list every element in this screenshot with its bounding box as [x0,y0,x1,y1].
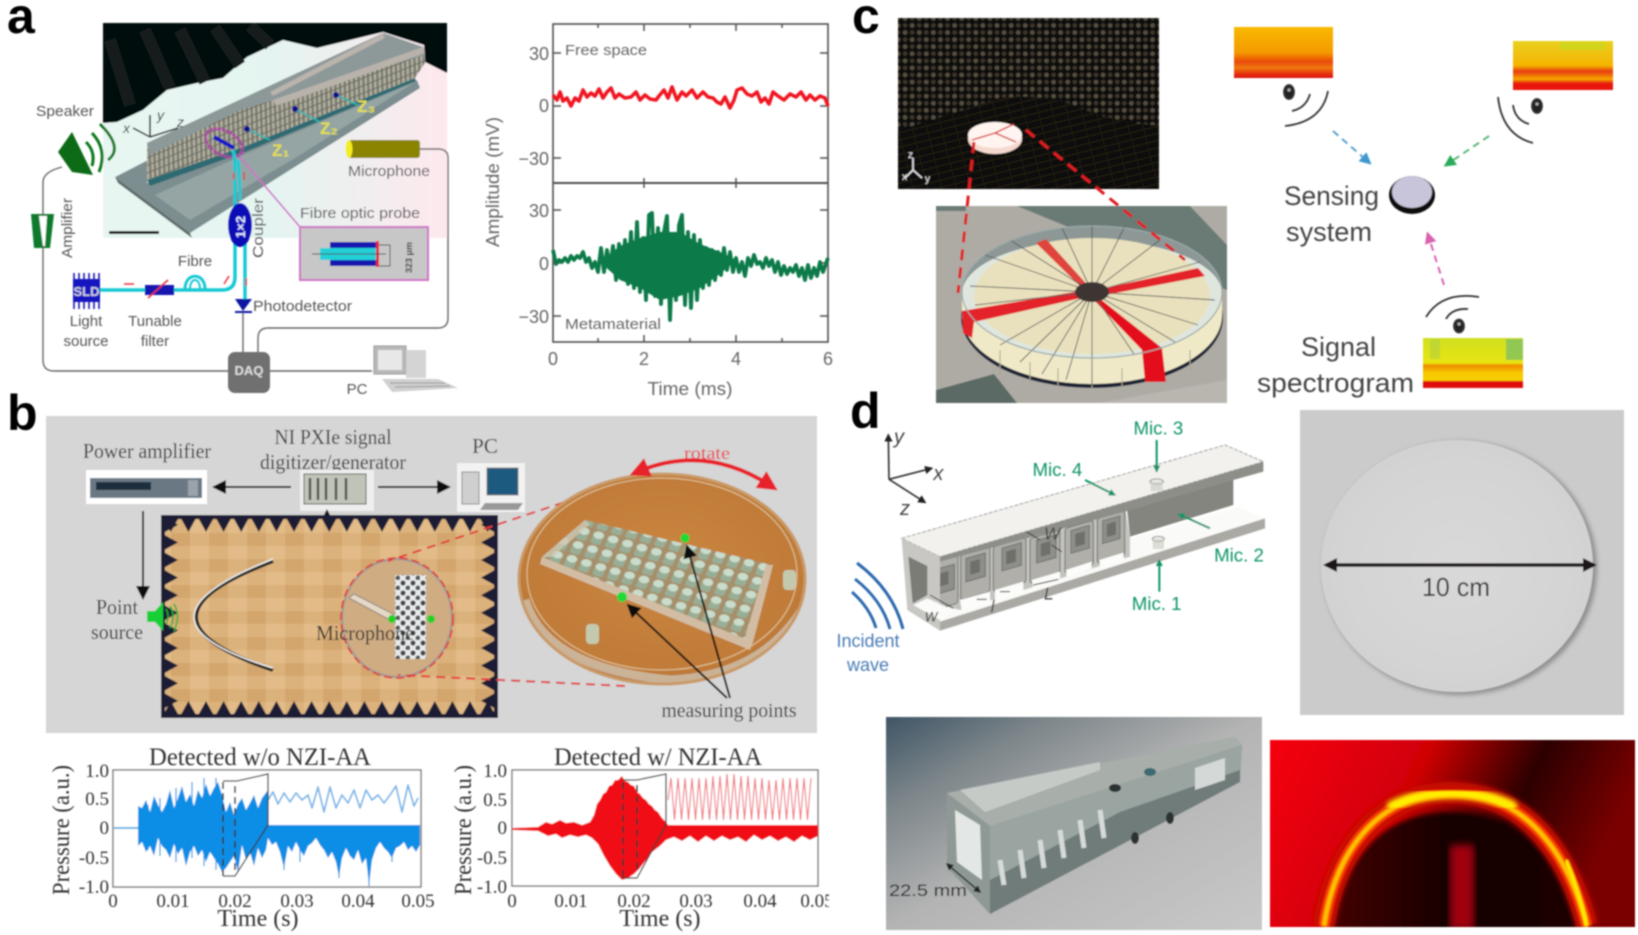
y axis title: Pressure (a.u.) [451,765,477,895]
label: Coupler: Coupler [250,198,267,258]
spectrogram: top left [1234,27,1333,78]
x axis numbers [548,349,833,369]
photo: rainbow-trapping metamaterial sample: Z₁ [272,141,289,160]
blue spikes [148,778,392,886]
panel a chart: amplitude vs time [483,24,833,399]
photo: rainbow-trapping metamaterial sample: z [176,114,184,130]
panel label b: b [7,385,38,441]
x axis numbers [506,893,830,908]
photo: rainbow-trapping metamaterial sample [103,23,447,238]
x axis numbers: 0.05 [401,891,435,912]
y axis numbers: 30 [529,201,549,221]
label: PC: PC [347,381,368,398]
icon: sound source 2 [1498,97,1542,143]
photo: rainbow-trapping metamaterial sample: Z₃ [357,97,375,116]
icon: photodetector [235,299,252,313]
x axis numbers: 0.02 [218,891,252,912]
inset: fibre optic probe [300,227,428,280]
photo: rainbow-trapping metamaterial sample: x [122,120,131,136]
plot frame [512,770,818,886]
dimension arrow [1323,558,1597,572]
label: 22.5 mm: 22.5 mm [889,881,967,900]
zoom dashed lines [958,130,1185,293]
photo: rainbow-trapping metamaterial sample: Z₂ [320,119,338,138]
label: Free space: Free space [565,42,647,59]
chart: detected with NZI-AA [451,744,834,932]
icon: sound source 3 [1426,296,1479,332]
label: Speaker: Speaker [36,103,94,120]
label: Tunable filter: Tunable [128,313,182,330]
red trace [553,87,828,108]
inset: fibre optic probe: 323 μm [404,242,414,273]
panel a: fibre optic metamaterial setup [7,0,458,398]
icon: sensing disc [1389,176,1435,214]
mic labels and arrows: Mic. 2 [1214,545,1264,566]
dashed arrow: blue [1333,131,1364,158]
x axis numbers: 0.03 [679,891,713,912]
icon: SLD light source [73,273,100,309]
sample under test in rotating holder [341,558,453,678]
plot frame [113,770,421,887]
label: Incident wave: wave [846,655,889,675]
chart title: Detected w/ NZI-AA [554,744,762,771]
x axis numbers: 0 [548,349,558,369]
y axis numbers [79,761,109,898]
photo: fabricated waveguide [886,717,1262,930]
photo: wooden floor parabolic chamber [162,516,497,717]
x axis title: Time (ms) [648,379,732,399]
label: Sensing system [1284,181,1379,247]
icon: signal digitizer [300,470,374,511]
label: NI PXIe signal digitizer/generator: NI PXIe signal [274,425,392,449]
component: DAQ: DAQ [235,363,263,378]
label: Light source: source [63,333,109,350]
label: Microphone: Microphone [316,621,414,645]
y axis title: Pressure (a.u.) [49,765,75,895]
schematic: waveguide: w [925,606,939,626]
label: Microphone: Microphone [348,163,430,180]
panel d: waveguide sensor [836,383,1635,930]
zoom window lines [623,774,666,878]
label: Signal spectrogram: Signal [1301,332,1376,362]
x axis numbers: 0.04 [341,891,375,912]
x axis numbers [108,891,435,912]
icon: axes: x [932,463,944,485]
zoom dashed lines [388,493,625,686]
spectrogram: top right [1513,41,1613,90]
photo: anechoic chamber: x [902,172,907,183]
label: rotate: rotate [684,443,730,463]
label: Point source: source [91,620,143,644]
x axis title: Time (s) [217,906,299,932]
y axis numbers [518,44,549,327]
y axis numbers: 0.5 [483,790,507,811]
label: NI PXIe signal digitizer/generator: digitizer/generator [260,450,406,474]
x axis numbers: 6 [823,349,833,369]
x axis numbers: 2 [639,349,649,369]
y axis numbers: 0 [100,818,109,839]
photo: metamaterial disk [936,206,1227,403]
panel label d: d [850,383,881,439]
icon: axes: z [899,498,910,520]
label: Metamaterial: Metamaterial [565,316,661,333]
photo: rainbow-trapping metamaterial sample: y [156,107,165,123]
y axis numbers: 1.0 [85,761,109,782]
label: Light source: Light [70,313,103,330]
icon: axes: y [892,426,905,448]
y axis numbers: 0 [539,96,549,116]
y axis title: Amplitude (mV) [483,117,503,247]
zoom inset trace [668,774,811,820]
red signal [512,776,818,880]
label: Power amplifier: Power amplifier [83,439,211,463]
x axis title: Time (s) [619,906,701,932]
y axis numbers: -1.0 [477,877,507,898]
photo: anechoic chamber: z [908,150,913,161]
y axis numbers: −30 [518,307,549,327]
x axis numbers: 0 [507,891,517,912]
dimension line [947,864,980,892]
label: Point source: Point [96,595,138,619]
chart frame [553,24,828,342]
label: Tunable filter: filter [141,333,169,350]
label: Point source [91,595,143,644]
x axis numbers: 4 [731,349,741,369]
blue signal [138,782,420,885]
label: Signal spectrogram: spectrogram [1257,368,1414,398]
baseline [114,827,138,829]
y axis numbers: 0 [539,254,549,274]
y axis numbers [477,761,507,898]
icon: 1x2 coupler [228,203,252,247]
x axis numbers: 0.05 [800,891,834,912]
icon: axes [888,426,944,520]
photo: anechoic chamber: y [925,174,930,185]
red signal arrows [124,172,246,286]
green core of signal [600,232,736,300]
grey setup background [46,416,817,733]
icon: incident wave arcs [852,563,903,629]
label: Signal spectrogram [1257,332,1414,398]
icon: PC [457,463,525,512]
component: DAQ [228,352,270,393]
icon: PC [374,346,458,392]
mic labels and arrows: Mic. 1 [1132,593,1182,614]
zoom inset trace [268,785,418,812]
y axis numbers: -0.5 [477,848,507,869]
x axis numbers: 0.04 [743,891,777,912]
photo: 10 cm disc [1300,410,1624,715]
label: 10 cm: 10 cm [1422,572,1490,602]
y axis numbers: -0.5 [79,848,109,869]
label: Fibre optic probe: Fibre optic probe [300,205,420,222]
heat map: arc response [1270,740,1635,930]
label: Incident wave: Incident [836,631,900,651]
x axis numbers: 0.01 [554,891,588,912]
label: measuring points: measuring points [662,700,797,722]
label: Sensing system: system [1286,217,1372,247]
icon: sound source 1 [1284,85,1328,126]
signal wires [43,149,448,371]
label: Photodetector: Photodetector [253,298,352,315]
schematic: waveguide [902,445,1265,631]
label: Sensing system: Sensing [1284,181,1379,211]
fibre optic path [100,150,300,300]
y axis numbers: 0.5 [85,789,109,810]
spectrogram: bottom [1423,338,1523,388]
x axis numbers: 0.01 [156,891,190,912]
mic labels and arrows [1032,417,1264,614]
label: PC: PC [472,434,498,458]
dashed arrow: pink [1430,241,1444,285]
mic labels and arrows: Mic. 3 [1133,417,1183,438]
mic labels and arrows: Mic. 4 [1032,459,1082,480]
panel c: multidirectional sensing [852,0,1613,403]
icon: tunable filter [145,280,174,298]
icon: point source speaker [147,602,178,631]
green trace [553,213,828,320]
y axis numbers: 30 [529,44,549,64]
x axis numbers: 0.02 [617,891,651,912]
icon: 1x2 coupler: 1×2 [233,216,248,238]
y axis numbers: 1.0 [483,761,507,782]
x axis numbers: 0 [108,891,118,912]
icon: microphone [346,140,420,158]
x axis numbers: 0.03 [280,891,314,912]
y axis numbers: -1.0 [79,877,109,898]
zoom window lines [223,774,268,876]
y axis numbers: 0 [498,818,507,839]
icon: power amplifier [86,470,207,504]
icon: speaker [58,124,114,175]
label: Amplifier: Amplifier [59,198,76,258]
photo: zoomed metamaterial dish [518,473,806,685]
dashed arrow: green [1452,136,1489,161]
label: Fibre: Fibre [178,253,212,270]
y axis numbers: −30 [518,149,549,169]
icon: SLD light source: SLD [74,284,100,299]
photo: anechoic chamber [898,18,1159,189]
chart title: Detected w/o NZI-AA [149,744,371,771]
chart: detected without NZI-AA [49,744,435,932]
arrows between instruments [143,487,449,619]
label: NI PXIe signal digitizer/generator [260,425,406,474]
schematic: waveguide: W [1044,523,1062,543]
schematic: waveguide: L [1044,583,1054,603]
panel b: experimental setup [7,385,817,733]
schematic: waveguide: l [991,597,996,617]
icon: amplifier [31,214,54,248]
rotate arrow [637,460,771,486]
measuring points arrows [628,546,730,698]
